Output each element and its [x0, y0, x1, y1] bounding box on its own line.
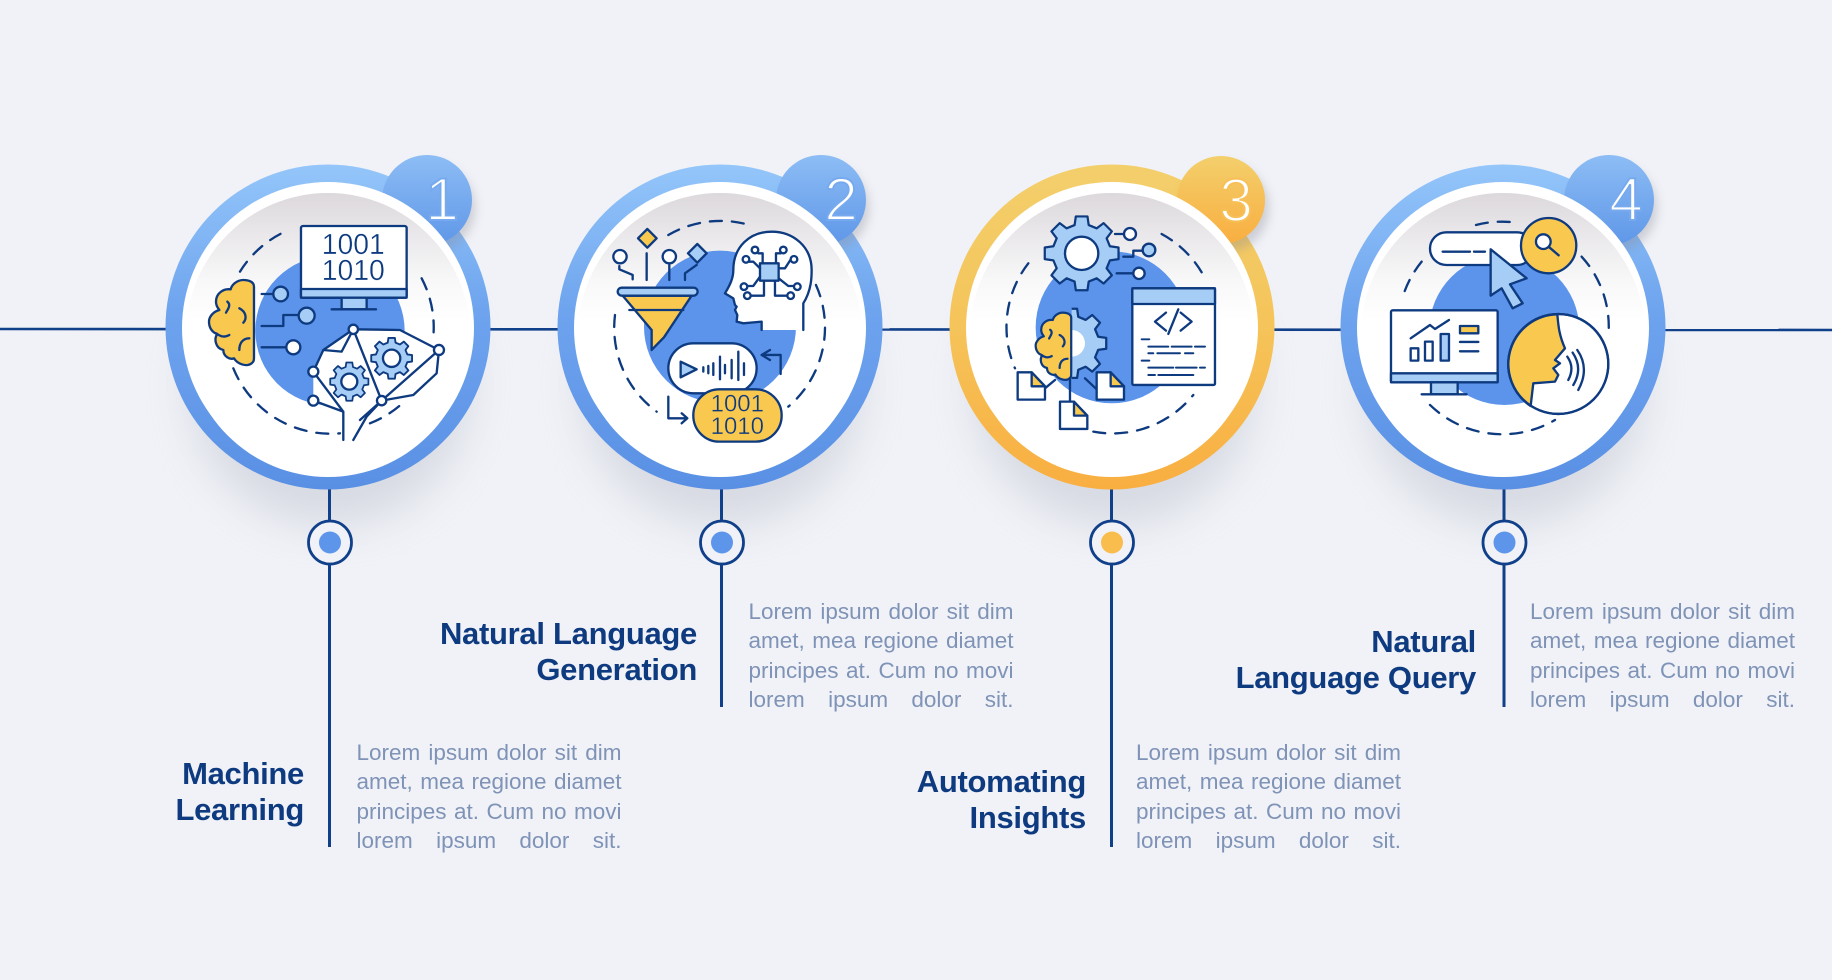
heading: Natural Language Query: Language Query — [1236, 660, 1476, 695]
plate 2 — [574, 182, 866, 477]
text block 2: principes at. Cum no movi — [748, 658, 1014, 683]
text block 4: Lorem ipsum dolor sit dim — [1530, 599, 1795, 624]
heading: Automating Insights: Insights — [970, 800, 1086, 835]
text block 1: lorem ipsum dolor sit. — [356, 828, 622, 853]
vertical line 2 — [720, 486, 723, 707]
step 4 circle — [1340, 155, 1666, 707]
step 2 circle — [558, 155, 882, 707]
text block 3: amet, mea regione diamet — [1136, 769, 1401, 794]
ring 3 — [950, 164, 1274, 490]
heading: Automating Insights — [917, 764, 1086, 835]
node 1 — [308, 521, 352, 564]
heading: Automating Insights: Automating — [917, 764, 1086, 799]
horizontal timeline line — [0, 329, 1832, 330]
heading: Natural Language Generation: Generation — [536, 652, 697, 687]
text block 3: lorem ipsum dolor sit. — [1136, 828, 1401, 853]
text block 1: amet, mea regione diamet — [356, 769, 622, 794]
shadows under circles — [190, 245, 1645, 525]
vertical line 4 — [1502, 486, 1506, 707]
node 4 — [1483, 521, 1526, 564]
plate 1 — [182, 182, 474, 477]
icon: natural language generation: 1010 — [711, 413, 764, 440]
badge 1 — [382, 155, 475, 252]
badge 4 — [1564, 155, 1657, 252]
icon: natural language generation — [613, 221, 825, 442]
heading: Machine Learning: Learning — [175, 792, 304, 827]
text block 1: Lorem ipsum dolor sit dim — [356, 740, 622, 765]
text block 4: amet, mea regione diamet — [1530, 628, 1795, 653]
icon: machine learning — [209, 226, 444, 440]
heading: Machine Learning — [175, 756, 304, 827]
heading: Natural Language Query: Natural — [1371, 624, 1476, 659]
text block 1 — [356, 740, 622, 853]
text block 4 — [1530, 599, 1795, 712]
text block 4: principes at. Cum no movi — [1530, 658, 1795, 683]
text block 2: amet, mea regione diamet — [748, 628, 1014, 653]
badge 3 — [1177, 156, 1269, 252]
ring 2 — [558, 164, 882, 490]
plate 3 — [966, 182, 1258, 477]
text block 2 — [748, 599, 1014, 712]
icon: machine learning: 1010 — [322, 255, 385, 287]
icon: natural language query — [1391, 218, 1609, 434]
icon: machine learning: 1001 — [322, 229, 385, 261]
vertical line 1 — [328, 486, 331, 847]
text block 3: principes at. Cum no movi — [1136, 799, 1401, 824]
vertical line 3 — [1110, 486, 1113, 847]
ring 4 — [1340, 164, 1666, 490]
text block 2: lorem ipsum dolor sit. — [748, 687, 1014, 712]
icon: natural language generation: 1001 — [711, 391, 764, 418]
heading: Natural Language Generation — [440, 616, 697, 687]
step 1 circle — [166, 155, 490, 847]
node 3 — [1090, 521, 1134, 564]
badge 3: 3 — [1219, 167, 1253, 234]
badge 4: 4 — [1609, 166, 1643, 233]
badge 2 — [776, 155, 869, 252]
text block 2: Lorem ipsum dolor sit dim — [748, 599, 1014, 624]
step 3 circle — [950, 156, 1274, 847]
text block 3 — [1136, 740, 1401, 853]
heading: Natural Language Query — [1236, 624, 1476, 695]
icon: automating insights — [1006, 216, 1215, 433]
text block 4: lorem ipsum dolor sit. — [1530, 687, 1795, 712]
ring 1 — [166, 164, 490, 490]
heading: Natural Language Generation: Natural Language — [440, 616, 697, 651]
text block 1: principes at. Cum no movi — [356, 799, 622, 824]
node 2 — [700, 521, 744, 564]
plate 4 — [1357, 182, 1649, 477]
badge 2: 2 — [824, 166, 858, 233]
badge 1: 1 — [425, 166, 459, 233]
text block 3: Lorem ipsum dolor sit dim — [1136, 740, 1401, 765]
infographic graphics — [0, 155, 1832, 847]
heading: Machine Learning: Machine — [182, 756, 304, 791]
